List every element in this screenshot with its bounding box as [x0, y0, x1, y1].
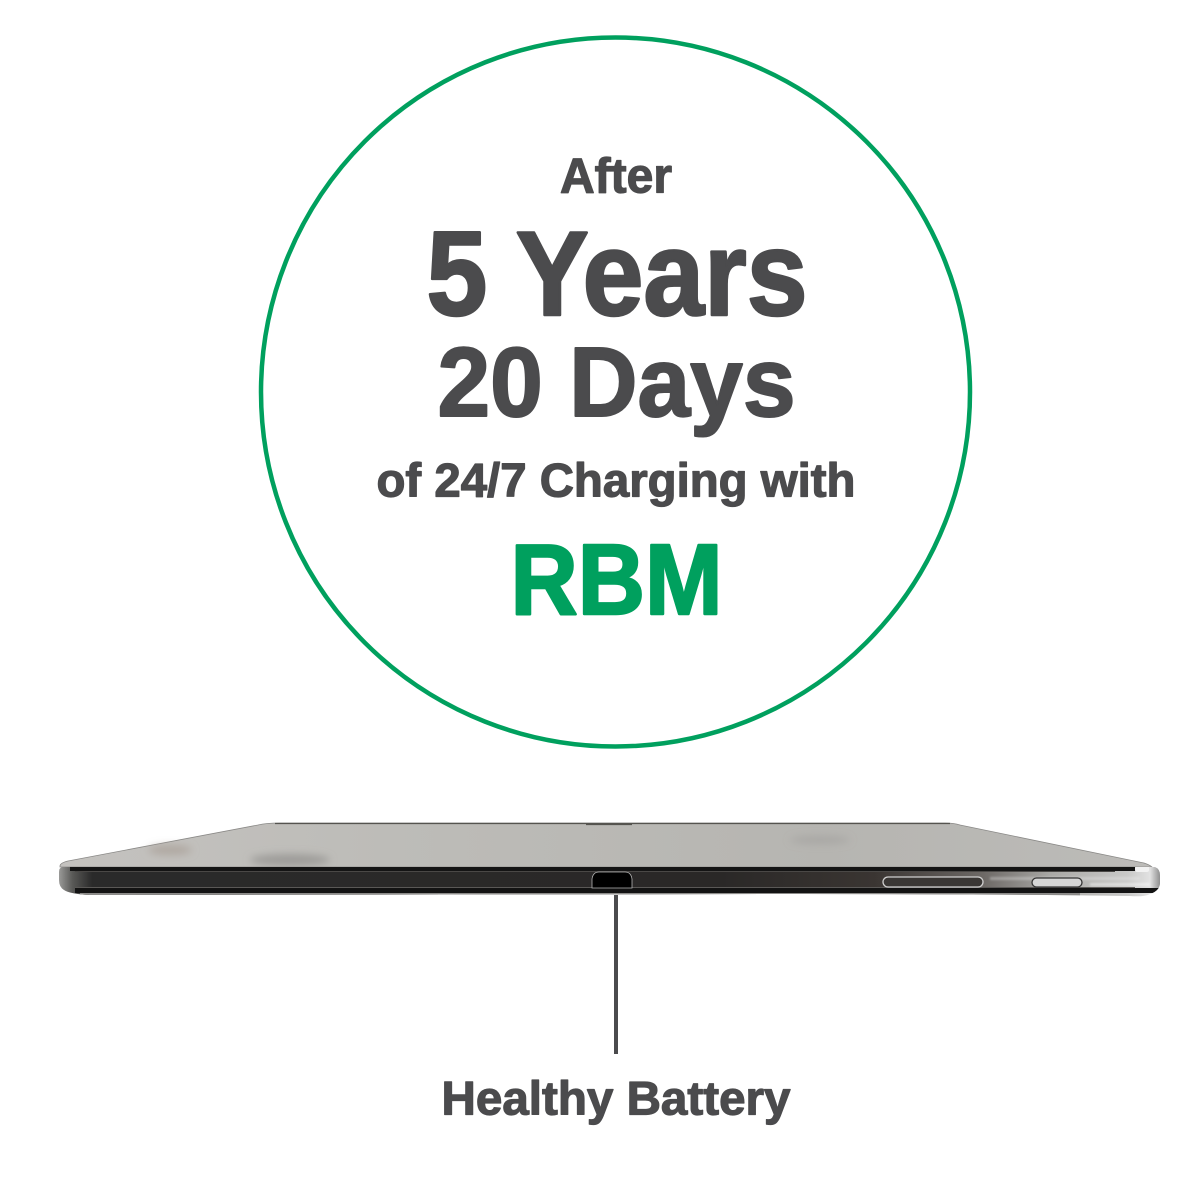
charging port	[592, 872, 632, 888]
tablet top face	[60, 823, 1152, 867]
tablet side band	[59, 866, 1161, 898]
text: 20 Days: 20 Days	[438, 327, 796, 437]
pointer line	[614, 895, 618, 1054]
text: After: After	[560, 150, 672, 204]
text: Healthy Battery: Healthy Battery	[442, 1072, 790, 1124]
text: RBM: RBM	[510, 524, 722, 636]
text: 5 Years: 5 Years	[426, 207, 808, 341]
circle outline	[261, 38, 970, 746]
surface smudges	[148, 836, 850, 866]
top edge line	[275, 824, 950, 825]
text: of 24/7 Charging with: of 24/7 Charging with	[376, 454, 856, 506]
volume button long	[883, 877, 983, 887]
tablet device	[59, 823, 1161, 898]
volume button short	[1032, 878, 1082, 887]
